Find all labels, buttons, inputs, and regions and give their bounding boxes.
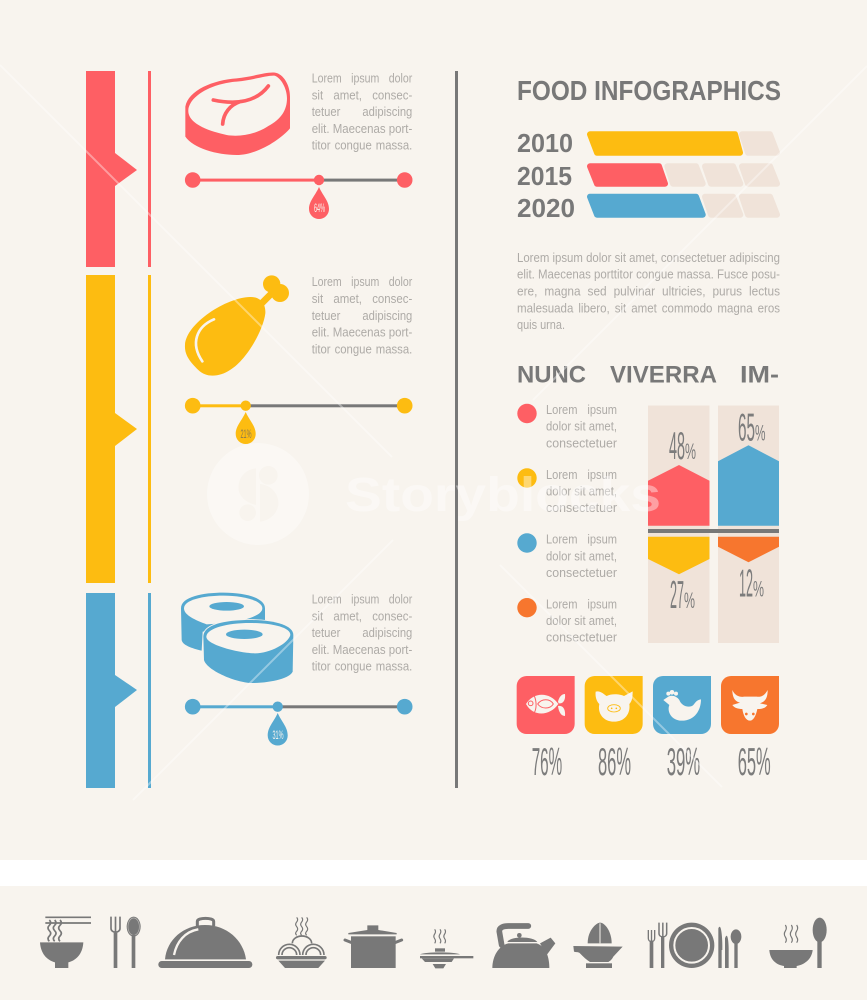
text: meat description: titor congue massa. xyxy=(312,138,412,153)
value: 12%: 12 xyxy=(739,563,753,606)
value: 48% xyxy=(669,425,696,468)
panel: sushi section xyxy=(86,591,413,788)
bar cells xyxy=(590,134,777,215)
legend item: yellow xyxy=(517,467,618,515)
icon: plate of pasta xyxy=(276,917,327,968)
icon: fish tile xyxy=(517,676,575,734)
value: 65%: 65 xyxy=(738,407,755,450)
blue ribbon bar xyxy=(86,593,137,788)
panel: poultry section xyxy=(86,274,413,583)
icon: cow tile xyxy=(721,676,779,734)
value: 12% xyxy=(739,563,764,606)
legend item: blue: Lorem ipsum xyxy=(546,532,617,547)
center divider xyxy=(455,71,458,788)
slider: 31% xyxy=(185,699,413,746)
value: 27%: 27 xyxy=(670,574,684,617)
value: 65% xyxy=(738,407,766,450)
yellow ribbon bar xyxy=(86,275,137,583)
legend item: yellow: consectetuer xyxy=(546,500,618,515)
animal tiles: 86% xyxy=(598,741,631,784)
legend item: orange: dolor sit amet, xyxy=(546,613,617,628)
legend item: yellow: dolor sit amet, xyxy=(546,484,617,498)
text: sushi description: sit amet, consec- xyxy=(312,608,412,623)
icon: soup bowl and spoon xyxy=(769,918,827,968)
text: intro paragraph: quis urna. xyxy=(517,317,565,332)
legend item: red: consectetuer xyxy=(546,435,618,450)
text: poultry description: elit. Maecenas port- xyxy=(312,324,412,340)
icon: cloche xyxy=(158,918,252,968)
text: poultry description: Lorem ipsum dolor xyxy=(312,274,413,289)
heading: nunc viverra: NUNC xyxy=(517,362,586,389)
legend item: red: Lorem ipsum xyxy=(546,402,617,417)
slider: 31%: 31% xyxy=(272,728,284,742)
legend item: blue: consectetuer xyxy=(546,565,618,580)
year labels: 2020 xyxy=(517,193,575,223)
text: intro paragraph xyxy=(517,250,780,332)
icon: noodle bowl xyxy=(40,917,91,968)
red thin rule xyxy=(148,71,151,267)
chart: year progress bars xyxy=(517,128,777,223)
animal tiles xyxy=(517,676,779,784)
year labels: 2015 xyxy=(517,161,572,191)
slider: 64% xyxy=(185,172,413,219)
text: poultry description: sit amet, consec- xyxy=(312,291,412,306)
icon: chicken tile xyxy=(653,676,711,734)
text: meat description: Lorem ipsum dolor xyxy=(312,70,413,85)
animal tiles: 65% xyxy=(738,741,771,784)
value: 65%: % xyxy=(755,421,766,446)
year labels xyxy=(517,128,575,223)
icon: place setting xyxy=(648,923,741,968)
watermark: Storyblocks xyxy=(345,469,661,522)
text: intro paragraph: Lorem ipsum dolor sit amet, consectetuer adipiscing xyxy=(517,250,780,265)
value: 12%: % xyxy=(753,577,764,602)
legend item: yellow: Lorem ipsum xyxy=(546,467,617,482)
bar: 65% xyxy=(718,445,779,526)
bar: 27% xyxy=(648,537,710,574)
value: 48%: % xyxy=(685,439,696,464)
bar: 12% xyxy=(718,537,779,562)
icon: kettle xyxy=(492,926,555,968)
text: meat description xyxy=(312,70,413,153)
red ribbon bar xyxy=(86,71,137,267)
icon: chicken leg xyxy=(185,275,289,376)
slider: 21%: 21% xyxy=(240,427,252,441)
text: sushi description: Lorem ipsum dolor xyxy=(312,591,413,606)
text: sushi description: elit. Maecenas port- xyxy=(312,642,412,657)
slider: 21% xyxy=(185,398,413,444)
bar: 48% xyxy=(648,465,710,526)
legend item: blue: dolor sit amet, xyxy=(546,548,617,563)
text: meat description: sit amet, consec- xyxy=(312,87,412,102)
blue thin rule xyxy=(148,593,151,788)
legend item: red: dolor sit amet, xyxy=(546,419,617,434)
heading: nunc viverra: IM- xyxy=(740,362,779,389)
text: poultry description: tetuer adipiscing xyxy=(312,308,412,323)
value: 27% xyxy=(670,574,695,617)
text: meat description: tetuer adipiscing xyxy=(312,104,412,119)
value: 27%: % xyxy=(684,588,695,613)
animal tiles: 39% xyxy=(667,741,700,784)
icon: cooking pot xyxy=(345,925,402,968)
value: 48%: 48 xyxy=(669,425,685,468)
icon: frying pan xyxy=(420,929,473,968)
slider: 64%: 64% xyxy=(314,201,325,215)
text: poultry description xyxy=(312,274,413,356)
text: intro paragraph: ere, magna sed pulvinar ultricies, purus lectus xyxy=(517,284,780,298)
icon: sushi rolls xyxy=(181,593,293,683)
heading: nunc viverra: VIVERRA xyxy=(610,362,717,389)
panel: meat section xyxy=(86,70,413,267)
yellow thin rule xyxy=(148,275,151,583)
watermark xyxy=(0,65,867,800)
legend item: blue xyxy=(517,532,618,580)
legend item: red xyxy=(517,402,618,450)
icon row: kitchen xyxy=(40,917,827,968)
icon: juicer xyxy=(573,923,623,968)
text: meat description: elit. Maecenas port- xyxy=(312,121,412,136)
text: sushi description: titor congue massa. xyxy=(312,659,412,674)
icon: pig tile xyxy=(585,676,643,734)
text: intro paragraph: malesuada libero, sit amet commodo magna eros xyxy=(517,300,780,316)
heading: nunc viverra xyxy=(517,362,779,389)
animal tiles: 76% xyxy=(532,741,562,784)
text: intro paragraph: elit. Maecenas porttitor congue massa. Fusce posu- xyxy=(517,266,780,282)
legend item: orange xyxy=(517,596,618,645)
heading: food infographics: FOOD INFOGRAPHICS xyxy=(517,75,781,106)
legend item: orange: consectetuer xyxy=(546,630,618,645)
year labels: 2010 xyxy=(517,128,573,158)
icon: fork and spoon xyxy=(111,917,141,968)
legend xyxy=(517,402,618,645)
text: sushi description: tetuer adipiscing xyxy=(312,625,412,640)
text: poultry description: titor congue massa. xyxy=(312,341,412,356)
icon: steak xyxy=(185,73,290,155)
chart: diverging columns xyxy=(648,406,779,643)
legend item: orange: Lorem ipsum xyxy=(546,596,617,612)
text: sushi description xyxy=(312,591,413,674)
